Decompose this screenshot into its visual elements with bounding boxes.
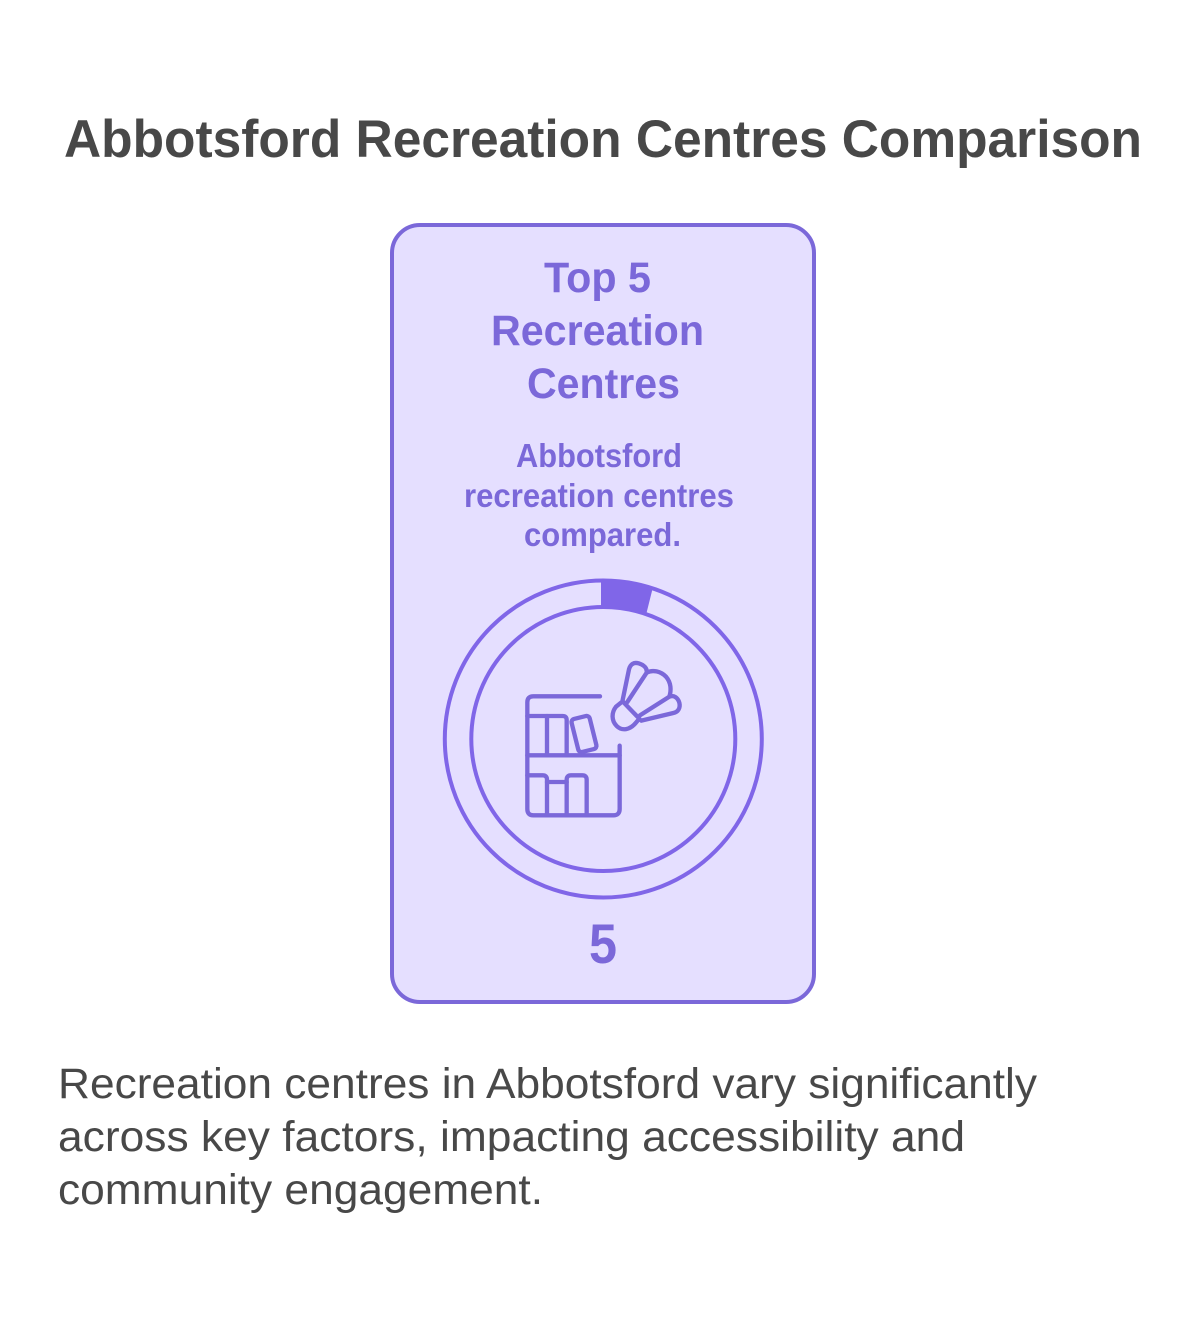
panel background (392, 225, 814, 1002)
icon: bookshelf (527, 696, 620, 815)
summary text (58, 1060, 1038, 1214)
donut chart (445, 579, 762, 898)
panel description: recreation centres (464, 477, 734, 514)
panel heading: Recreation (491, 307, 704, 355)
summary text: community engagement. (58, 1166, 543, 1214)
title: Abbotsford Recreation Centres Comparison (64, 110, 1142, 169)
panel heading: Centres (527, 360, 680, 408)
summary text: Recreation centres in Abbotsford vary significantly (58, 1060, 1038, 1108)
panel description (464, 437, 734, 553)
panel: top 5 recreation centres (392, 225, 814, 1002)
panel description: compared. (524, 516, 681, 553)
panel heading (491, 254, 704, 408)
icon: shuttlecock (613, 663, 680, 729)
donut value: 5 (589, 912, 617, 975)
panel description: Abbotsford (516, 437, 682, 474)
icon: bookshelf and shuttlecock (527, 663, 680, 815)
donut highlighted segment (601, 579, 653, 613)
summary text: across key factors, impacting accessibility and (58, 1113, 965, 1161)
panel heading: Top 5 (544, 254, 651, 302)
